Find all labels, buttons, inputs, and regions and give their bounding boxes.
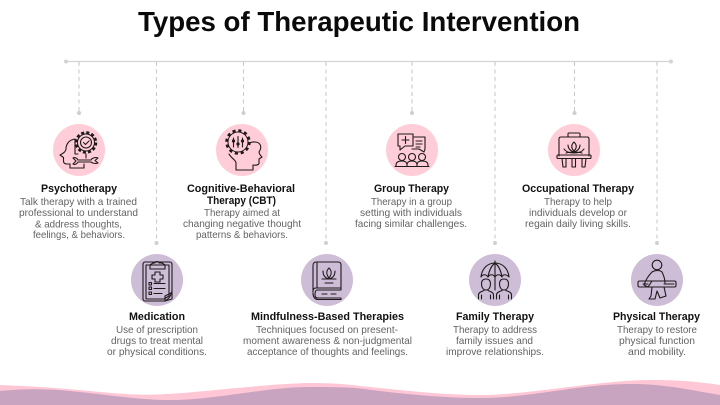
description: Therapy to help xyxy=(544,197,612,208)
panel: mindfulness-based therapies xyxy=(243,254,412,358)
description: improve relationships. xyxy=(446,347,544,358)
description: family issues and xyxy=(456,336,533,347)
description: individuals develop or xyxy=(529,208,628,219)
heading xyxy=(187,183,295,207)
description: regain daily living skills. xyxy=(525,219,631,230)
panel: occupational therapy xyxy=(522,124,635,230)
description xyxy=(107,325,207,358)
description xyxy=(19,197,138,241)
description: Therapy to address xyxy=(453,325,537,336)
description xyxy=(243,325,412,358)
description: Talk therapy with a trained xyxy=(20,197,137,208)
panel: cognitive-behavioral therapy xyxy=(183,124,301,241)
heading: Occupational Therapy xyxy=(522,183,635,195)
panel: medication xyxy=(107,254,207,358)
description: setting with individuals xyxy=(360,208,462,219)
icon: easel with lotus xyxy=(548,124,600,176)
panel: group therapy xyxy=(355,124,467,230)
icon: head with gear and brain xyxy=(216,124,268,176)
background wave: purple xyxy=(0,384,720,405)
description xyxy=(183,208,301,241)
description: feelings, & behaviors. xyxy=(33,230,125,241)
description: moment awareness & non-judgmental xyxy=(243,336,412,347)
heading: Therapy (CBT) xyxy=(207,195,276,207)
description: Use of prescription xyxy=(116,325,198,336)
description: Techniques focused on present- xyxy=(256,325,398,336)
description xyxy=(525,197,631,230)
description: Therapy to restore xyxy=(617,325,697,336)
background wave: pink xyxy=(0,380,720,405)
icon: medical clipboard xyxy=(131,254,183,306)
panel: physical therapy xyxy=(613,254,701,358)
description: & address thoughts, xyxy=(35,220,122,230)
description: drugs to treat mental xyxy=(111,336,203,347)
icon: head with gear and wrench xyxy=(53,124,105,176)
description xyxy=(355,197,467,230)
icon: two people under umbrella xyxy=(469,254,521,306)
heading: Physical Therapy xyxy=(613,311,701,323)
description xyxy=(446,325,544,358)
title: Types of Therapeutic Intervention xyxy=(138,6,580,37)
description: patterns & behaviors. xyxy=(196,230,288,241)
description: physical function xyxy=(619,336,695,347)
heading: Family Therapy xyxy=(456,311,535,323)
heading: Group Therapy xyxy=(374,183,450,195)
description: Therapy aimed at xyxy=(204,208,280,219)
icon: person on balance bar xyxy=(631,254,683,306)
heading: Cognitive-Behavioral xyxy=(187,183,295,195)
description: facing similar challenges. xyxy=(355,219,467,230)
heading: Medication xyxy=(129,311,185,323)
description: or physical conditions. xyxy=(107,347,207,358)
description: professional to understand xyxy=(19,208,138,219)
icon: book with lotus xyxy=(301,254,353,306)
description: acceptance of thoughts and feelings. xyxy=(247,347,408,358)
timeline connector xyxy=(64,60,673,245)
description xyxy=(617,325,697,358)
heading: Mindfulness-Based Therapies xyxy=(251,311,404,323)
panel: psychotherapy xyxy=(19,124,138,241)
description: changing negative thought xyxy=(183,219,301,230)
panel: family therapy xyxy=(446,254,544,358)
icon: three people with speech bubbles xyxy=(386,124,438,176)
description: Therapy in a group xyxy=(371,197,452,208)
description: and mobility. xyxy=(628,347,686,358)
heading: Psychotherapy xyxy=(41,183,118,195)
